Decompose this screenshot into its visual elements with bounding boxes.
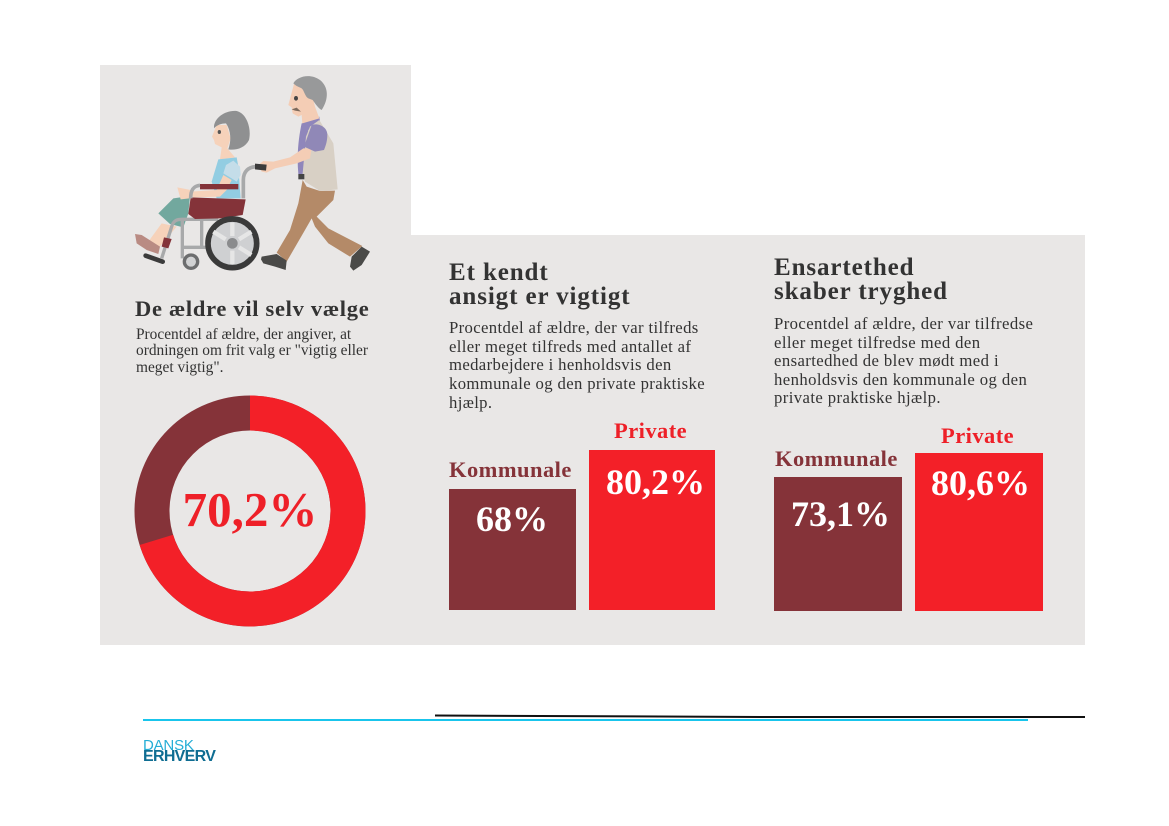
description: henholdsvis den kommunale og den bbox=[774, 370, 1027, 389]
panel: De ældre vil selv vælge bbox=[135, 296, 369, 376]
woman head bbox=[212, 125, 235, 159]
description: Procentdel af ældre, der var tilfreds bbox=[449, 318, 699, 337]
description: Procentdel af ældre, der angiver, at bbox=[136, 326, 351, 342]
donut chart 70,2% bbox=[134, 396, 366, 626]
description: hjælp. bbox=[449, 393, 492, 412]
panel: Ensartethed skaber tryghed bbox=[774, 254, 1043, 611]
value: 68% bbox=[476, 499, 548, 539]
logo word: Erhverv: ERHVERV bbox=[143, 748, 215, 765]
heading: skaber tryghed bbox=[774, 278, 948, 305]
heading: ansigt er vigtigt bbox=[449, 283, 630, 310]
woman torso bbox=[212, 157, 241, 198]
man shoes bbox=[261, 247, 370, 271]
description: eller meget tilfredse med den bbox=[774, 333, 980, 352]
heading bbox=[449, 259, 630, 310]
wheelchair seat bbox=[188, 197, 246, 219]
man legs bbox=[277, 180, 362, 262]
label: Kommunale bbox=[449, 457, 572, 482]
bar: Private 80,6% bbox=[915, 423, 1043, 611]
bar: Kommunale 68% bbox=[449, 457, 576, 610]
description: Procentdel af ældre, der var tilfredse bbox=[774, 314, 1033, 333]
label: Private bbox=[941, 423, 1014, 448]
label: Private bbox=[614, 418, 687, 443]
heading: De ældre vil selv vælge bbox=[135, 296, 369, 321]
logo word: Dansk: DANSK bbox=[143, 737, 194, 754]
description bbox=[774, 314, 1033, 407]
bar bbox=[774, 477, 902, 611]
bar bbox=[589, 450, 715, 610]
wheelchair back frame bbox=[243, 167, 257, 198]
wheelchair large wheel bbox=[208, 219, 257, 268]
heading: Et kendt bbox=[449, 259, 549, 286]
value: 80,6% bbox=[931, 463, 1030, 503]
donut chart 70,2%: 70,2% bbox=[183, 482, 317, 537]
heading bbox=[774, 254, 948, 305]
man arm bbox=[258, 148, 312, 173]
panel: Et kendt ansigt er vigtigt bbox=[449, 259, 715, 610]
description: kommunale og den private praktiske bbox=[449, 374, 705, 393]
woman arm bbox=[190, 175, 232, 197]
description bbox=[449, 318, 705, 412]
bar: Kommunale 73,1% bbox=[774, 446, 902, 611]
bar bbox=[915, 453, 1043, 611]
value: 80,2% bbox=[606, 462, 705, 502]
description: medarbejdere i henholdsvis den bbox=[449, 355, 672, 374]
illustration: man pushing woman in wheelchair bbox=[135, 76, 370, 271]
heading: Ensartethed bbox=[774, 254, 914, 281]
description: meget vigtig". bbox=[136, 359, 224, 376]
man head bbox=[288, 84, 319, 123]
bar bbox=[449, 489, 576, 610]
woman legs bbox=[148, 223, 177, 247]
label: Kommunale bbox=[775, 446, 898, 471]
description bbox=[136, 326, 368, 376]
description: eller meget tilfreds med antallet af bbox=[449, 337, 691, 356]
description: ensartedhed de blev mødt med i bbox=[774, 351, 999, 370]
logo: Dansk Erhverv bbox=[143, 737, 216, 765]
man torso bbox=[298, 117, 320, 175]
description: private praktiske hjælp. bbox=[774, 388, 941, 407]
value: 73,1% bbox=[791, 494, 890, 534]
description: ordningen om frit valg er "vigtig eller bbox=[136, 342, 368, 359]
wheelchair frame bbox=[162, 219, 218, 258]
bar: Private 80,2% bbox=[589, 418, 715, 610]
